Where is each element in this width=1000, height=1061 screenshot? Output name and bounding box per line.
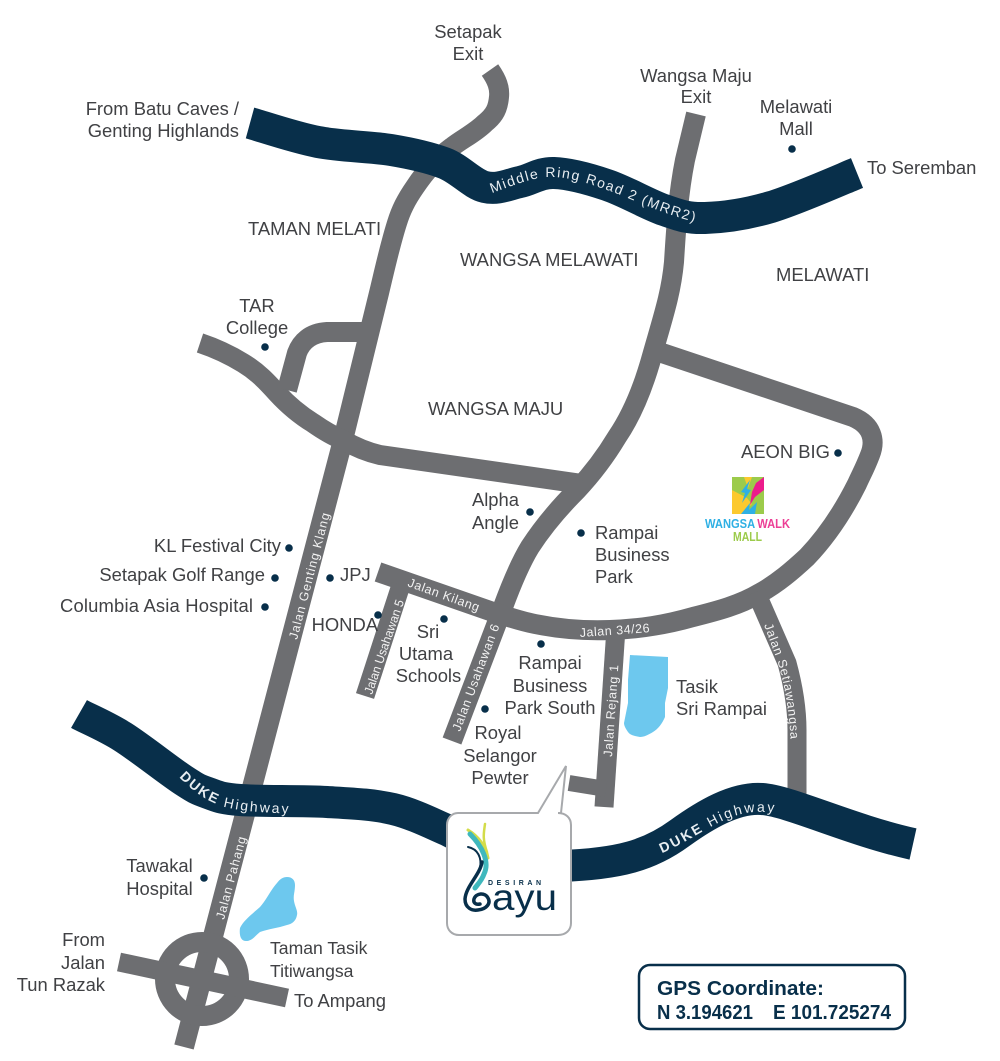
place: From Batu Caves / Genting Highlands: From Batu Caves / (86, 98, 240, 119)
GPS north value: N 3.194621 (657, 1002, 753, 1024)
place: Rampai Business Park: Business (595, 544, 670, 565)
place: To Ampang: To Ampang (294, 990, 386, 1011)
label: Jalan 34/26: Jalan 34/26 (579, 621, 650, 640)
place: Wangsa Maju Exit: Exit (681, 86, 711, 107)
GPS coordinate box (639, 965, 905, 1029)
place: Tasik Sri Rampai: Tasik (676, 676, 719, 697)
label: Jalan Usahawan 6: Jalan Usahawan 6 (450, 622, 502, 733)
place: Royal Selangor Pewter: Selangor (463, 745, 537, 766)
highway: Duke Highway east (560, 799, 913, 866)
place: From Jalan Tun Razak: From (62, 929, 105, 950)
label: Jalan Pahang: Jalan Pahang (213, 835, 249, 921)
GPS heading: GPS Coordinate: (657, 978, 824, 1000)
callout bubble (447, 766, 571, 935)
location dots (200, 145, 842, 882)
place: Melawati Mall: Mall (779, 118, 813, 139)
area: Wangsa Melawati: WANGSA MELAWATI (460, 249, 638, 270)
GPS east value: E 101.725274 (773, 1002, 892, 1024)
label: Duke Highway east: DUKE Highway (658, 804, 775, 853)
place: Setapak Golf Range: Setapak Golf Range (99, 564, 265, 585)
label: Jalan Kilang: Jalan Kilang (406, 576, 481, 614)
place: TAR College: TAR (239, 295, 275, 316)
logo text: ayu: ayu (492, 877, 557, 918)
road: stub to Desiran Bayu (569, 783, 606, 789)
label: Duke Highway west: DUKE Highway (180, 770, 289, 816)
place: Taman Tasik Titiwangsa: Titiwangsa (270, 961, 354, 981)
road: Wangsa Maju cross road (200, 343, 582, 484)
text: Wangsa Walk: WANGSAWALK (705, 517, 790, 531)
road: Wangsa Maju Exit (452, 114, 696, 741)
area: Taman Melati: TAMAN MELATI (248, 218, 381, 239)
place: JPJ: JPJ (340, 564, 371, 585)
callout: Desiran Bayu (447, 766, 571, 935)
place: HONDA: HONDA (312, 614, 379, 635)
place: Tawakal Hospital: Hospital (126, 878, 193, 899)
label: Middle Ring Road 2: Middle Ring Road 2 (MRR2) (490, 167, 695, 224)
grey road network (119, 70, 873, 1047)
icon: Wangsa Walk tile (732, 477, 764, 514)
logo text: Desiran: DESIRAN (488, 880, 545, 887)
place: Tawakal Hospital: Tawakal (126, 855, 193, 876)
place: Taman Tasik Titiwangsa: Taman Tasik (270, 938, 368, 958)
road: east-west through roundabout (119, 962, 287, 998)
place: Royal Selangor Pewter: Pewter (471, 767, 529, 788)
place: Rampai Business Park South: Park South (505, 697, 595, 718)
road: TAR College loop (287, 332, 366, 390)
road: Jalan Usahawan 5 (365, 585, 401, 696)
place: KL Festival City: KL Festival City (154, 535, 282, 556)
place: Setapak Exit: Exit (453, 43, 483, 64)
place: Rampai Business Park South: Business (513, 675, 587, 696)
road: Jalan Rejang 1 (604, 628, 616, 807)
place: Rampai Business Park: Rampai (595, 522, 658, 543)
place: From Jalan Tun Razak: Jalan (61, 952, 105, 973)
place: Melawati Mall: Melawati (760, 96, 832, 117)
text: Mall: MALL (733, 530, 762, 544)
place: Tasik Sri Rampai: Sri Rampai (676, 698, 767, 719)
area: Melawati: MELAWATI (776, 264, 869, 285)
place: Royal Selangor Pewter: Royal (474, 722, 522, 743)
place: From Batu Caves / Genting Highlands: Genting Highlands (88, 120, 239, 141)
road: Jalan Setiawangsa (756, 592, 797, 798)
road: roundabout ring (165, 942, 239, 1016)
place: Rampai Business Park: Park (595, 566, 634, 587)
label: Jalan Genting Klang: Jalan Genting Klang (286, 511, 333, 641)
label: Jalan Setiawangsa: Jalan Setiawangsa (764, 624, 798, 739)
road labels (180, 167, 798, 921)
place: AEON BIG: AEON BIG (741, 441, 830, 462)
highway: Middle Ring Road 2 (250, 123, 857, 218)
place: TAR College: College (226, 317, 288, 338)
road: Jalan Kilang and Jalan 34/26 loop (378, 353, 873, 630)
place: Alpha Angle: Angle (472, 512, 519, 533)
label: Jalan Rejang 1: Jalan Rejang 1 (601, 664, 621, 757)
place: Rampai Business Park South: Rampai (518, 652, 582, 673)
place: Wangsa Maju Exit: Wangsa Maju (640, 65, 752, 86)
highway: Duke Highway west (79, 714, 470, 842)
logo: Wangsa Walk Mall (705, 477, 790, 544)
place: Sri Utama Schools: Schools (396, 665, 461, 686)
place: Columbia Asia Hospital: Columbia Asia Hospital (60, 595, 253, 616)
place: To Seremban: To Seremban (867, 157, 976, 178)
dark highways (79, 123, 913, 866)
place: Sri Utama Schools: Sri (417, 621, 439, 642)
place: Alpha Angle: Alpha (472, 489, 520, 510)
place: Setapak Exit: Setapak (434, 21, 503, 42)
area: Wangsa Maju: WANGSA MAJU (428, 398, 563, 419)
place: Sri Utama Schools: Utama (399, 643, 454, 664)
place: From Jalan Tun Razak: Tun Razak (17, 974, 106, 995)
logo icon: Desiran Bayu swirl (465, 824, 489, 910)
lake: Tasik Sri Rampai (624, 655, 668, 737)
lake: Taman Tasik Titiwangsa (240, 877, 297, 941)
label: Jalan Usahawan 5: Jalan Usahawan 5 (362, 598, 407, 696)
road: Setapak Exit to Jalan Genting Klang (184, 70, 499, 1047)
